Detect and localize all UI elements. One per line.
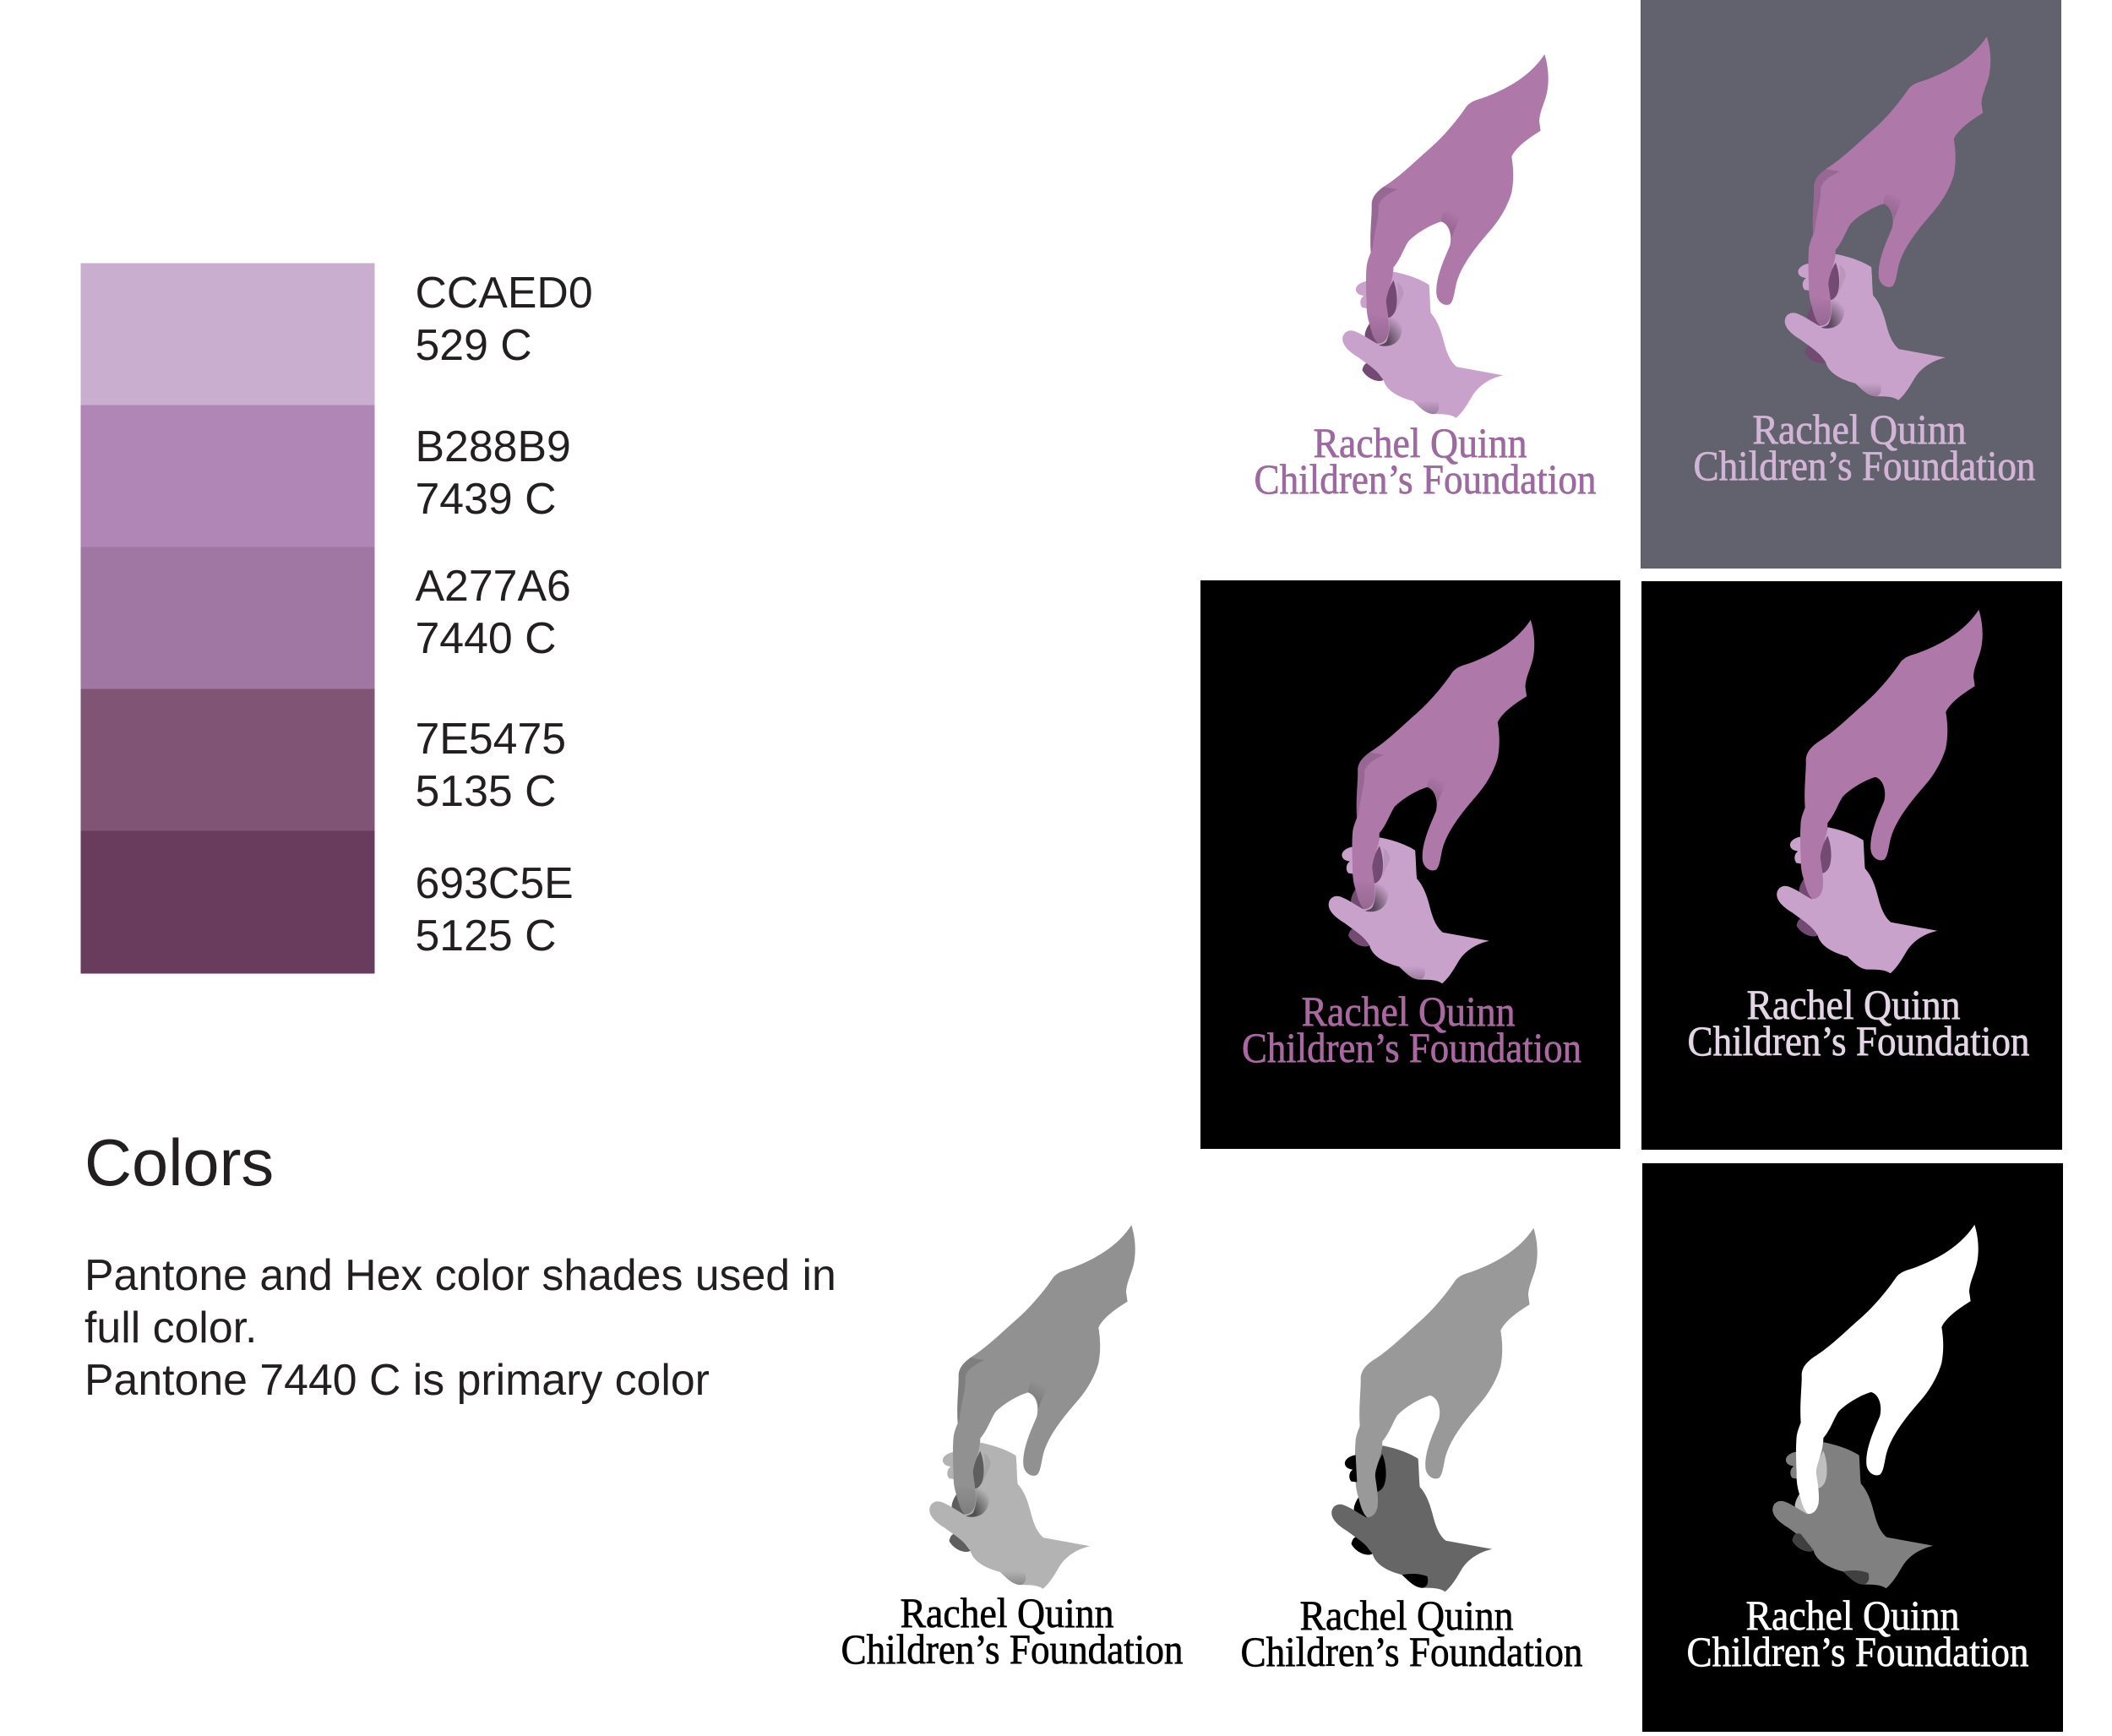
- panel: black 3: [1642, 1163, 2063, 1732]
- logo: full color on white: [1254, 54, 1597, 503]
- description text: Pantone and Hex color shades used in: [84, 1250, 836, 1299]
- logo: reversed white on black: [1686, 1225, 2029, 1675]
- wordmark: [1693, 405, 2036, 489]
- hand mark: [1785, 36, 1990, 400]
- wordmark: Children’s Foundation: [1688, 1017, 2029, 1064]
- wordmark: [1240, 1592, 1583, 1675]
- logo: flat color on black: [1688, 610, 2029, 1064]
- hand mark: [1329, 620, 1534, 983]
- wordmark: Children’s Foundation: [841, 1625, 1183, 1673]
- wordmark: [1254, 419, 1597, 503]
- swatch labels: 7439 C: [416, 474, 557, 523]
- logo: full color on gray: [1693, 36, 2036, 489]
- hand mark: [1342, 54, 1549, 418]
- swatch labels: 529 C: [416, 320, 532, 369]
- swatch labels: 5125 C: [416, 911, 557, 960]
- wordmark: Rachel Quinn: [1299, 1592, 1514, 1639]
- wordmark: Rachel Quinn: [901, 1589, 1113, 1636]
- wordmark: [1242, 988, 1581, 1071]
- panel: black 1: [1200, 580, 1620, 1149]
- wordmark: [1686, 1592, 2029, 1675]
- wordmark: Children’s Foundation: [1240, 1628, 1583, 1675]
- wordmark: Children’s Foundation: [1686, 1628, 2029, 1675]
- wordmark: Rachel Quinn: [1301, 988, 1516, 1035]
- swatch labels: 693C5E: [416, 858, 574, 907]
- description text: [84, 1250, 836, 1404]
- swatch labels: B288B9: [416, 422, 571, 471]
- wordmark: Children’s Foundation: [1693, 442, 2036, 489]
- hand mark: [929, 1225, 1135, 1589]
- logo: full color on black: [1242, 620, 1581, 1071]
- hand mark: [1772, 1225, 1979, 1588]
- wordmark: Rachel Quinn: [1745, 1592, 1960, 1639]
- swatch labels: 7E5475: [416, 714, 566, 763]
- panel: gray background: [1641, 0, 2061, 569]
- wordmark: Rachel Quinn: [1313, 419, 1527, 466]
- logo: grayscale flat: [1240, 1228, 1583, 1675]
- panel: black 2: [1641, 581, 2062, 1150]
- hand mark: [1331, 1228, 1538, 1592]
- wordmark: Rachel Quinn: [1747, 981, 1960, 1028]
- heading: Colors: Colors: [84, 1127, 274, 1200]
- swatch labels: 5135 C: [416, 766, 557, 815]
- swatch labels: A277A6: [416, 561, 571, 610]
- wordmark: Rachel Quinn: [1752, 405, 1967, 453]
- wordmark: Children’s Foundation: [1254, 455, 1597, 503]
- wordmark: Children’s Foundation: [1242, 1024, 1581, 1071]
- description text: full color.: [84, 1303, 257, 1352]
- swatch labels: [416, 268, 593, 960]
- description text: Pantone 7440 C is primary color: [84, 1355, 710, 1404]
- swatch labels: 7440 C: [416, 613, 557, 662]
- logo: grayscale with shading: [841, 1225, 1183, 1673]
- wordmark: [841, 1589, 1183, 1673]
- hand mark: [1777, 610, 1983, 973]
- wordmark: [1688, 981, 2029, 1064]
- swatch labels: CCAED0: [416, 268, 593, 317]
- color swatches: [81, 264, 375, 973]
